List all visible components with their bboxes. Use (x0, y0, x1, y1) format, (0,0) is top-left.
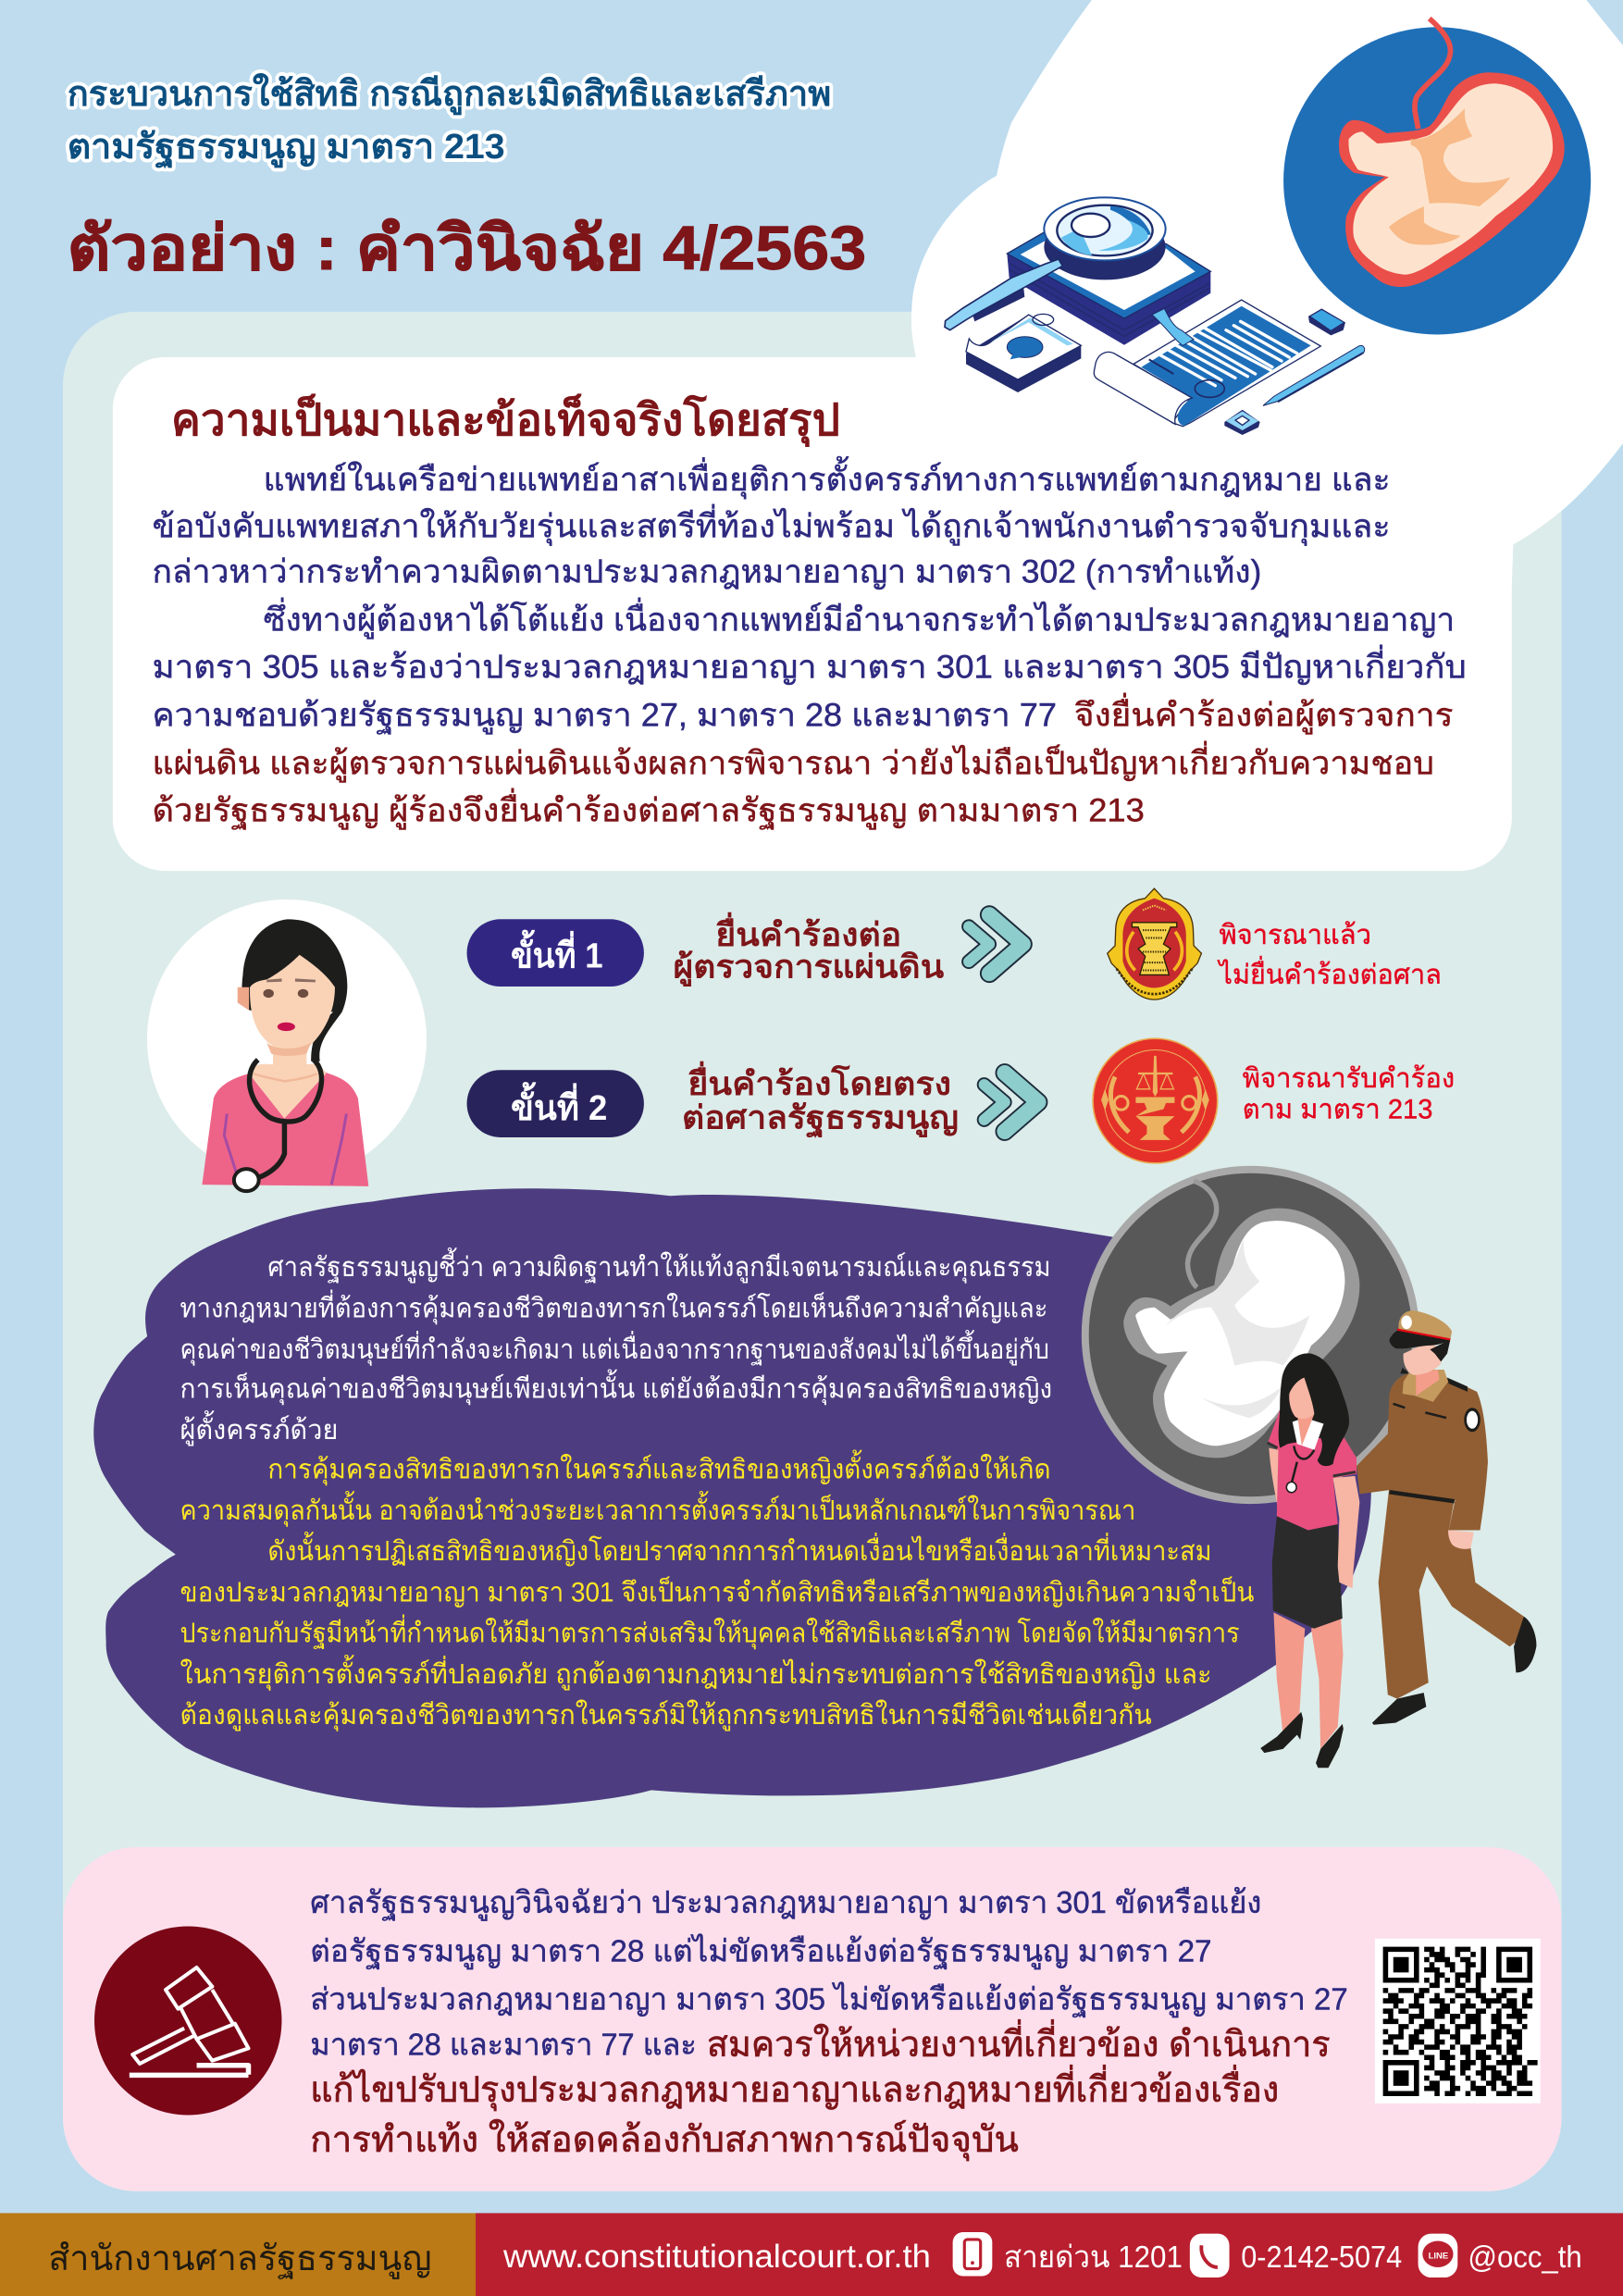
text block: verdict: ต่อรัฐธรรมนูญ มาตรา 28 แต่ไม่ขัดหรือแย้งต่อรัฐธรรมนูญ มาตรา 27 (310, 1933, 1212, 1969)
text block: background paragraphs: จึงยื่นคำร้องต่อผู้ตรวจการ (1074, 693, 1454, 735)
text block: background paragraphs: ด้วยรัฐธรรมนูญ ผู้ร้องจึงยื่นคำร้องต่อศาลรัฐธรรมนูญ ตามมาตรา 213 (152, 788, 1145, 829)
text block: reasoning in white (180, 1247, 1052, 1446)
lens (1044, 214, 1166, 279)
line handle: @occ_th (1468, 2240, 1582, 2275)
phone number: 0-2142-5074 (1241, 2240, 1402, 2275)
panel: main mint background (63, 312, 1562, 2191)
text block: reasoning in yellow: การคุ้มครองสิทธิของทารกในครรภ์และสิทธิของหญิงตั้งครรภ์ต้องให้เกิด (267, 1449, 1051, 1485)
arrow: step 1 chevrons (969, 915, 1023, 974)
illustration: grey fetus circle with doctor and police (1082, 1166, 1536, 1768)
panel: court reasoning blob (93, 1188, 1371, 1807)
text block: reasoning in yellow (180, 1449, 1254, 1731)
text block: reasoning in white: ทางกฎหมายที่ต้องการคุ้มครองชีวิตของทารกในครรภ์โดยเห็นถึงความสำคัญและ (180, 1289, 1047, 1324)
text block: reasoning in yellow: ประกอบกับรัฐมีหน้าที่กำหนดให้มีมาตรการส่งเสริมให้บุคคลใช้สิทธิและเสรีภาพ โดยจัดให้มีมาตรการ (180, 1615, 1240, 1650)
scroll (1134, 300, 1320, 427)
steps section (147, 888, 1455, 1191)
illustration: doctor (147, 900, 427, 1191)
text block: verdict: แก้ไขปรับปรุงประมวลกฎหมายอาญาและกฎหมายที่เกี่ยวข้องเรื่อง (310, 2065, 1279, 2112)
text block: reasoning in white: ผู้ตั้งครรภ์ด้วย (180, 1410, 338, 1446)
heading: example ruling: ตัวอย่าง : คำวินิจฉัย 4/2563 (68, 215, 866, 283)
text block: background paragraphs: กล่าวหาว่ากระทำความผิดตามประมวลกฎหมายอาญา มาตรา 302 (การทำแท้ง) (152, 555, 1261, 590)
text block: background paragraphs: แผ่นดิน และผู้ตรวจการแผ่นดินแจ้งผลการพิจารณา ว่ายังไม่ถือเป็นปัญหาเกี่ยวกับความชอบ (152, 741, 1434, 783)
illustration: fetus in blue circle (1283, 19, 1591, 334)
title: process heading: กระบวนการใช้สิทธิ กรณีถูกละเมิดสิทธิและเสรีภาพ (68, 73, 831, 116)
pen (1263, 345, 1365, 405)
text block: verdict: ศาลรัฐธรรมนูญวินิจฉัยว่า ประมวลกฎหมายอาญา มาตรา 301 ขัดหรือแย้ง (310, 1886, 1261, 1921)
text: court result (1243, 1064, 1455, 1124)
QR code (1375, 1939, 1541, 2104)
website: www.constitutionalcourt.or.th (502, 2240, 931, 2275)
note pad (966, 315, 1081, 392)
police collar and head (1403, 1370, 1448, 1402)
step 1 pill (467, 919, 644, 987)
icon: line app: LINE (1429, 2251, 1448, 2261)
illustration: documents and magnifier (945, 197, 1365, 435)
icon: telephone (1190, 2234, 1230, 2277)
woman (1273, 1612, 1305, 1735)
icon: gavel in maroon circle (94, 1926, 281, 2115)
text block: background paragraphs: แพทย์ในเครือข่ายแพทย์อาสาเพื่อยุติการตั้งครรภ์ทางการแพทย์ตามกฎหมาย และ (264, 456, 1391, 499)
panel: background facts (113, 357, 1512, 871)
step 2 pill (467, 1070, 644, 1137)
text: ombudsman result: พิจารณาแล้ว (1219, 921, 1371, 950)
footer bar: office name: สำนักงานศาลรัฐธรรมนูญ (48, 2240, 432, 2279)
police body (1379, 1486, 1526, 1699)
footer bar: contacts (476, 2213, 1623, 2296)
step 1 description: ยื่นคำร้องต่อ (715, 912, 901, 953)
hotline: สายด่วน 1201 (1004, 2240, 1183, 2275)
text block: background paragraphs: ความชอบด้วยรัฐธรรมนูญ มาตรา 27, มาตรา 28 และมาตรา 77 (152, 699, 1057, 735)
text block: background paragraphs: ซึ่งทางผู้ต้องหาได้โต้แย้ง เนื่องจากแพทย์มีอำนาจกระทำได้ตามประมวลกฎหมายอาญา (264, 598, 1455, 639)
icon: constitutional court seal (1093, 1038, 1218, 1163)
step 1 description (674, 912, 944, 987)
heading: background summary: ความเป็นมาและข้อเท็จจริงโดยสรุป (171, 392, 840, 447)
text block: reasoning in yellow: ดังนั้นการปฏิเสธสิทธิของหญิงโดยปราศจากการกำหนดเงื่อนไขหรือเงื่อนเวลาที่เหมาะสม (267, 1532, 1212, 1567)
icon: line app (1419, 2234, 1457, 2277)
text block: reasoning in yellow: ความสมดุลกันนั้น อาจต้องนำช่วงระยะเวลาการตั้งครรภ์มาเป็นหลักเกณฑ์ในการพิจารณา (180, 1491, 1135, 1527)
step 2 pill: ขั้นที่ 2 (511, 1082, 607, 1128)
text block: reasoning in white: คุณค่าของชีวิตมนุษย์ที่กำลังจะเกิดมา แต่เนื่องจากรากฐานของสังคมไม่ได้ขึ้นอยู่กับ (180, 1330, 1049, 1366)
text block: reasoning in yellow: ของประมวลกฎหมายอาญา มาตรา 301 จึงเป็นการจำกัดสิทธิหรือเสรีภาพของหญิงเกินความจำเป็น (180, 1575, 1254, 1607)
footer bar: office name (0, 2213, 476, 2296)
text: ombudsman result (1218, 921, 1442, 990)
icon: mobile phone (953, 2232, 992, 2276)
step 2 description (682, 1061, 959, 1138)
text block: background paragraphs (152, 456, 1467, 829)
step 1 pill: ขั้นที่ 1 (511, 929, 603, 975)
book (1007, 254, 1210, 345)
text: court result: พิจารณารับคำร้อง (1243, 1064, 1455, 1094)
text block: reasoning in yellow: ต้องดูแลและคุ้มครองชีวิตของทารกในครรภ์มิให้ถูกกระทบสิทธิในการมีชีวิตเช่นเดียวกัน (180, 1699, 1152, 1731)
text: court result: ตาม มาตรา 213 (1243, 1095, 1432, 1124)
text block: verdict: มาตรา 28 และมาตรา 77 และ (310, 2029, 697, 2063)
text block: verdict: ส่วนประมวลกฎหมายอาญา มาตรา 305 ไม่ขัดหรือแย้งต่อรัฐธรรมนูญ มาตรา 27 (310, 1982, 1348, 2018)
text block: verdict: สมควรให้หน่วยงานที่เกี่ยวข้อง ดำเนินการ (707, 2019, 1331, 2065)
step 2 description: ต่อศาลรัฐธรรมนูญ (682, 1100, 959, 1138)
icon: ombudsman seal (1108, 888, 1201, 999)
title: process heading (68, 73, 831, 169)
arrow: step 2 chevrons (985, 1073, 1038, 1132)
text block: reasoning in yellow: ในการยุติการตั้งครรภ์ที่ปลอดภัย ถูกต้องตามกฎหมายไม่กระทบต่อการใช้สิทธิของหญิง และ (180, 1655, 1212, 1691)
title: process heading: ตามรัฐธรรมนูญ มาตรา 213 (68, 128, 505, 169)
text block: background paragraphs: มาตรา 305 และร้องว่าประมวลกฎหมายอาญา มาตรา 301 และมาตรา 305 มีปัญหาเกี่ยวกับ (152, 644, 1467, 685)
panel: ruling (63, 1847, 1562, 2191)
step 2 description: ยื่นคำร้องโดยตรง (688, 1061, 951, 1102)
step 1 description: ผู้ตรวจการแผ่นดิน (674, 950, 944, 987)
text block: background paragraphs: ข้อบังคับแพทยสภาให้กับวัยรุ่นและสตรีที่ท้องไม่พร้อม ได้ถูกเจ้าพนักงานตำรวจจับกุมและ (152, 503, 1391, 545)
small cube (1224, 410, 1260, 435)
text block: reasoning in white: ศาลรัฐธรรมนูญชี้ว่า ความผิดฐานทำให้แท้งลูกมีเจตนารมณ์และคุณธรรม (267, 1247, 1051, 1284)
eraser (1308, 308, 1345, 335)
text: ombudsman result: ไม่ยื่นคำร้องต่อศาล (1218, 956, 1442, 990)
white cloud behind illustrations (911, 0, 1623, 586)
grey fetus (1187, 1181, 1217, 1287)
ribbon (1152, 308, 1194, 345)
text block: verdict (310, 1886, 1348, 2162)
handle (973, 285, 1024, 321)
text block: reasoning in white: การเห็นคุณค่าของชีวิตมนุษย์เพียงเท่านั้น แต่ยังต้องมีการคุ้มครองสิทธิของหญิง (180, 1369, 1052, 1405)
text block: verdict: การทำแท้ง ให้สอดคล้องกับสภาพการณ์ปัจจุบัน (310, 2119, 1019, 2162)
